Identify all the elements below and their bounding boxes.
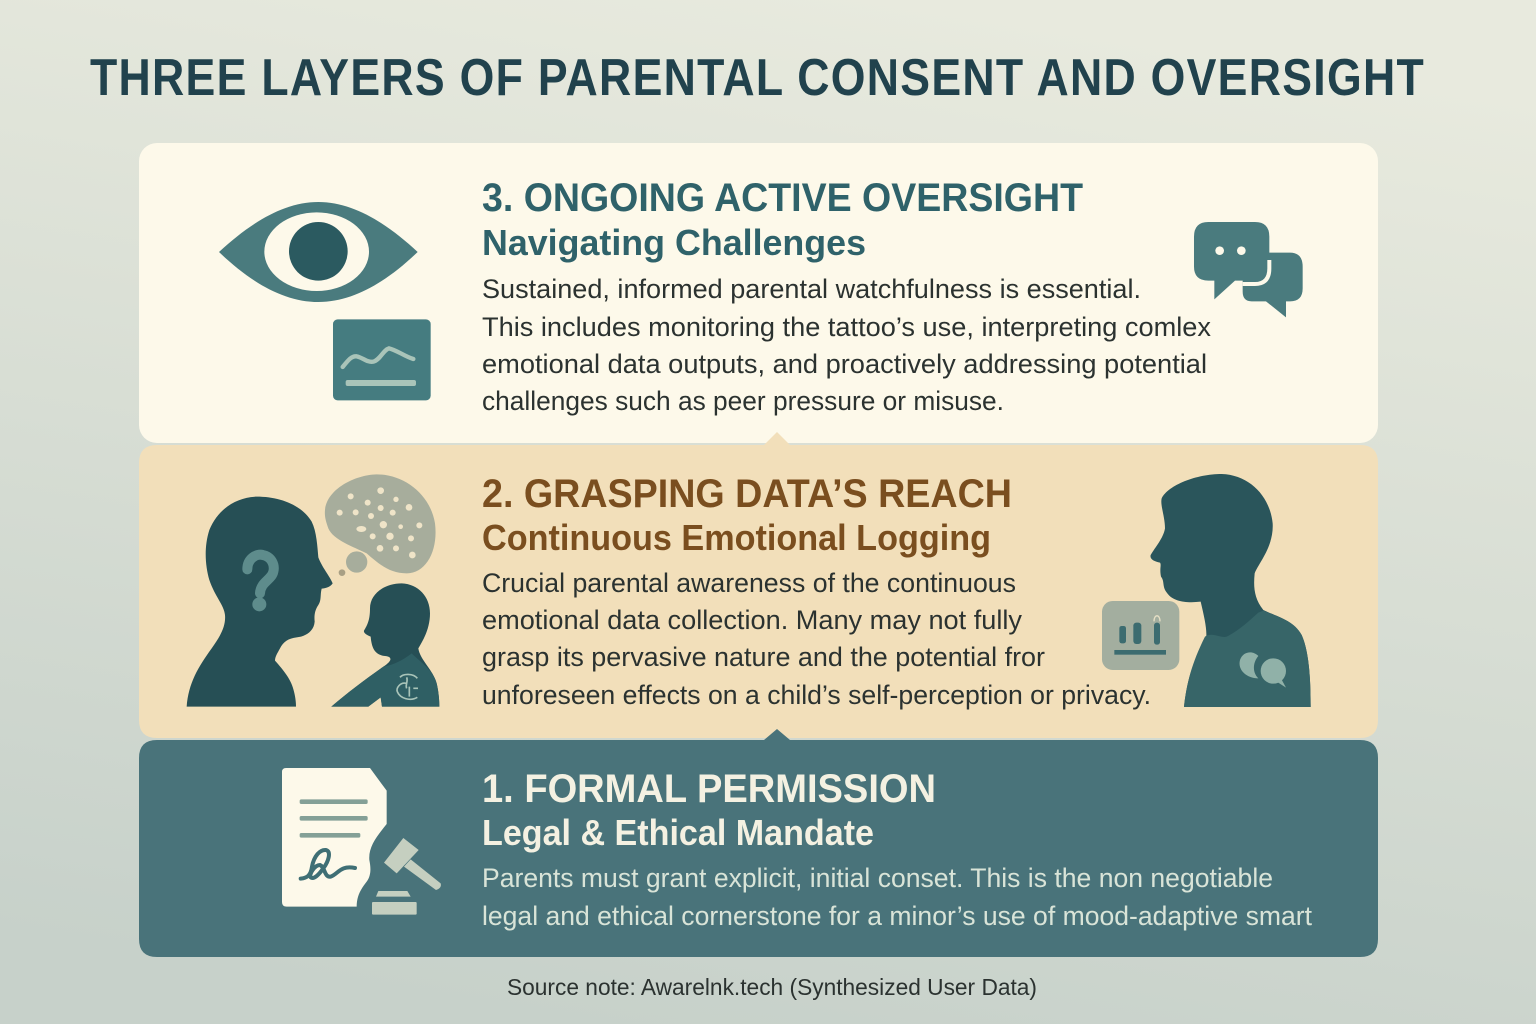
panel: layer 2 grasping data's reach (139, 432, 1378, 738)
icon: data chart card (333, 319, 431, 400)
body text: layer 3: challenges such as peer pressure or misuse. (482, 386, 1004, 416)
body text: layer 3 (482, 274, 1212, 416)
body text: layer 2: emotional data collection. Many may not fully (482, 605, 1022, 635)
icon: eye (219, 202, 418, 302)
source note: Source note: Awarelnk.tech (Synthesized User Data) (507, 974, 1037, 1000)
body text: layer 2: Crucial parental awareness of the continuous (482, 568, 1016, 598)
panel: layer 1 formal permission (139, 729, 1378, 957)
subheading: layer 2: Continuous Emotional Logging (482, 517, 991, 558)
body text: layer 3: Sustained, informed parental watchfulness is essential. (482, 274, 1141, 304)
body text: layer 2: grasp its pervasive nature and the potential fror (482, 642, 1045, 672)
subheading: layer 1: Legal & Ethical Mandate (482, 812, 874, 853)
heading: layer 2: 2. GRASPING DATA’S REACH (482, 472, 1012, 516)
body text: layer 1: Parents must grant explicit, initial conset. This is the non negotiable (482, 863, 1273, 893)
icon: signed document (282, 768, 387, 907)
body text: layer 2 (482, 568, 1151, 710)
body text: layer 1: legal and ethical cornerstone for a minor’s use of mood-adaptive smart (482, 901, 1312, 931)
icon: child silhouette with tattoo (331, 583, 439, 707)
icon: adult silhouette with question mark (187, 497, 333, 707)
heading: layer 3: 3. ONGOING ACTIVE OVERSIGHT (482, 176, 1083, 220)
panel: layer 3 ongoing active oversight (139, 143, 1378, 443)
icon: bar chart card (1102, 601, 1179, 670)
icon: gavel (372, 838, 441, 915)
icon: thought bubble with data dots (325, 474, 436, 576)
heading: layer 1: 1. FORMAL PERMISSION (482, 767, 936, 811)
body text: layer 3: This includes monitoring the tattoo’s use, interpreting comlex (482, 312, 1212, 342)
body text: layer 1 (482, 863, 1312, 931)
icon: chat bubbles (1194, 222, 1303, 317)
icon: teen silhouette (1150, 474, 1311, 707)
body text: layer 2: unforeseen effects on a child’s self-perception or privacy. (482, 680, 1151, 710)
subheading: layer 3: Navigating Challenges (482, 222, 866, 263)
body text: layer 3: emotional data outputs, and proactively addressing potential (482, 349, 1207, 379)
